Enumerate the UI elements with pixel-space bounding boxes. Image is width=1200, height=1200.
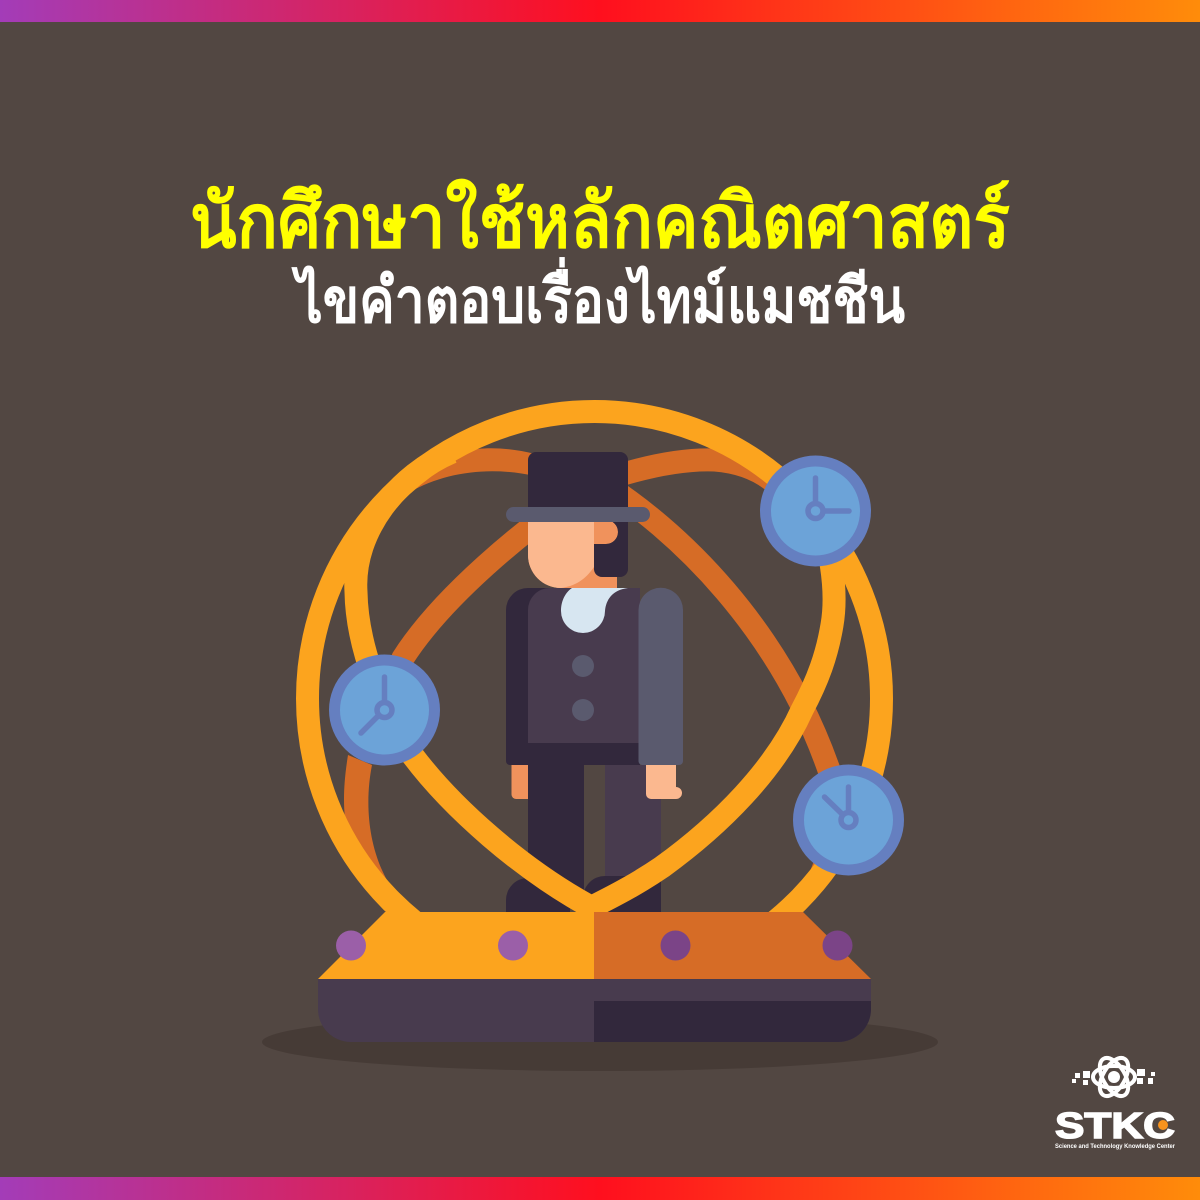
- clock: top right: [760, 456, 871, 566]
- buttons: [572, 655, 594, 677]
- hat brim: [506, 507, 650, 522]
- bottom gradient bar: [0, 1177, 1200, 1200]
- yellow ring and strands: [308, 412, 882, 986]
- beard: [594, 544, 628, 577]
- illustration: time machine: [262, 412, 938, 1071]
- base: [318, 912, 871, 1042]
- base top left: [318, 912, 594, 979]
- logo tagline: Science and Technology Knowledge Center: [1055, 1144, 1176, 1150]
- logo atom icon: [1072, 1053, 1155, 1101]
- ear: [594, 520, 618, 544]
- legs: [528, 765, 584, 895]
- ground shadow: [262, 1013, 938, 1071]
- collar: [561, 588, 628, 633]
- man: [506, 452, 683, 912]
- neck: [594, 570, 617, 588]
- hands: [512, 765, 528, 799]
- title line 2: ไขคำตอบเรื่องไทม์แมชชีน: [291, 257, 905, 336]
- title: [190, 178, 1010, 336]
- orange back strands: [335, 448, 848, 895]
- clock: left: [329, 654, 440, 766]
- jacket: [506, 588, 640, 765]
- title line 1: นักศึกษาใช้หลักคณิตศาสตร์: [190, 178, 1010, 263]
- base bottom: [318, 979, 871, 1042]
- clock: bottom right: [793, 764, 904, 876]
- shoes: [506, 878, 570, 912]
- top gradient bar: [0, 0, 1200, 22]
- sleeve: [638, 588, 683, 765]
- logo wordmark: STKC: [1055, 1105, 1175, 1146]
- hat: [528, 452, 628, 510]
- base top right: [594, 912, 871, 979]
- face: [528, 520, 594, 588]
- logo: STKC: [1055, 1053, 1176, 1150]
- rivets: [336, 930, 366, 960]
